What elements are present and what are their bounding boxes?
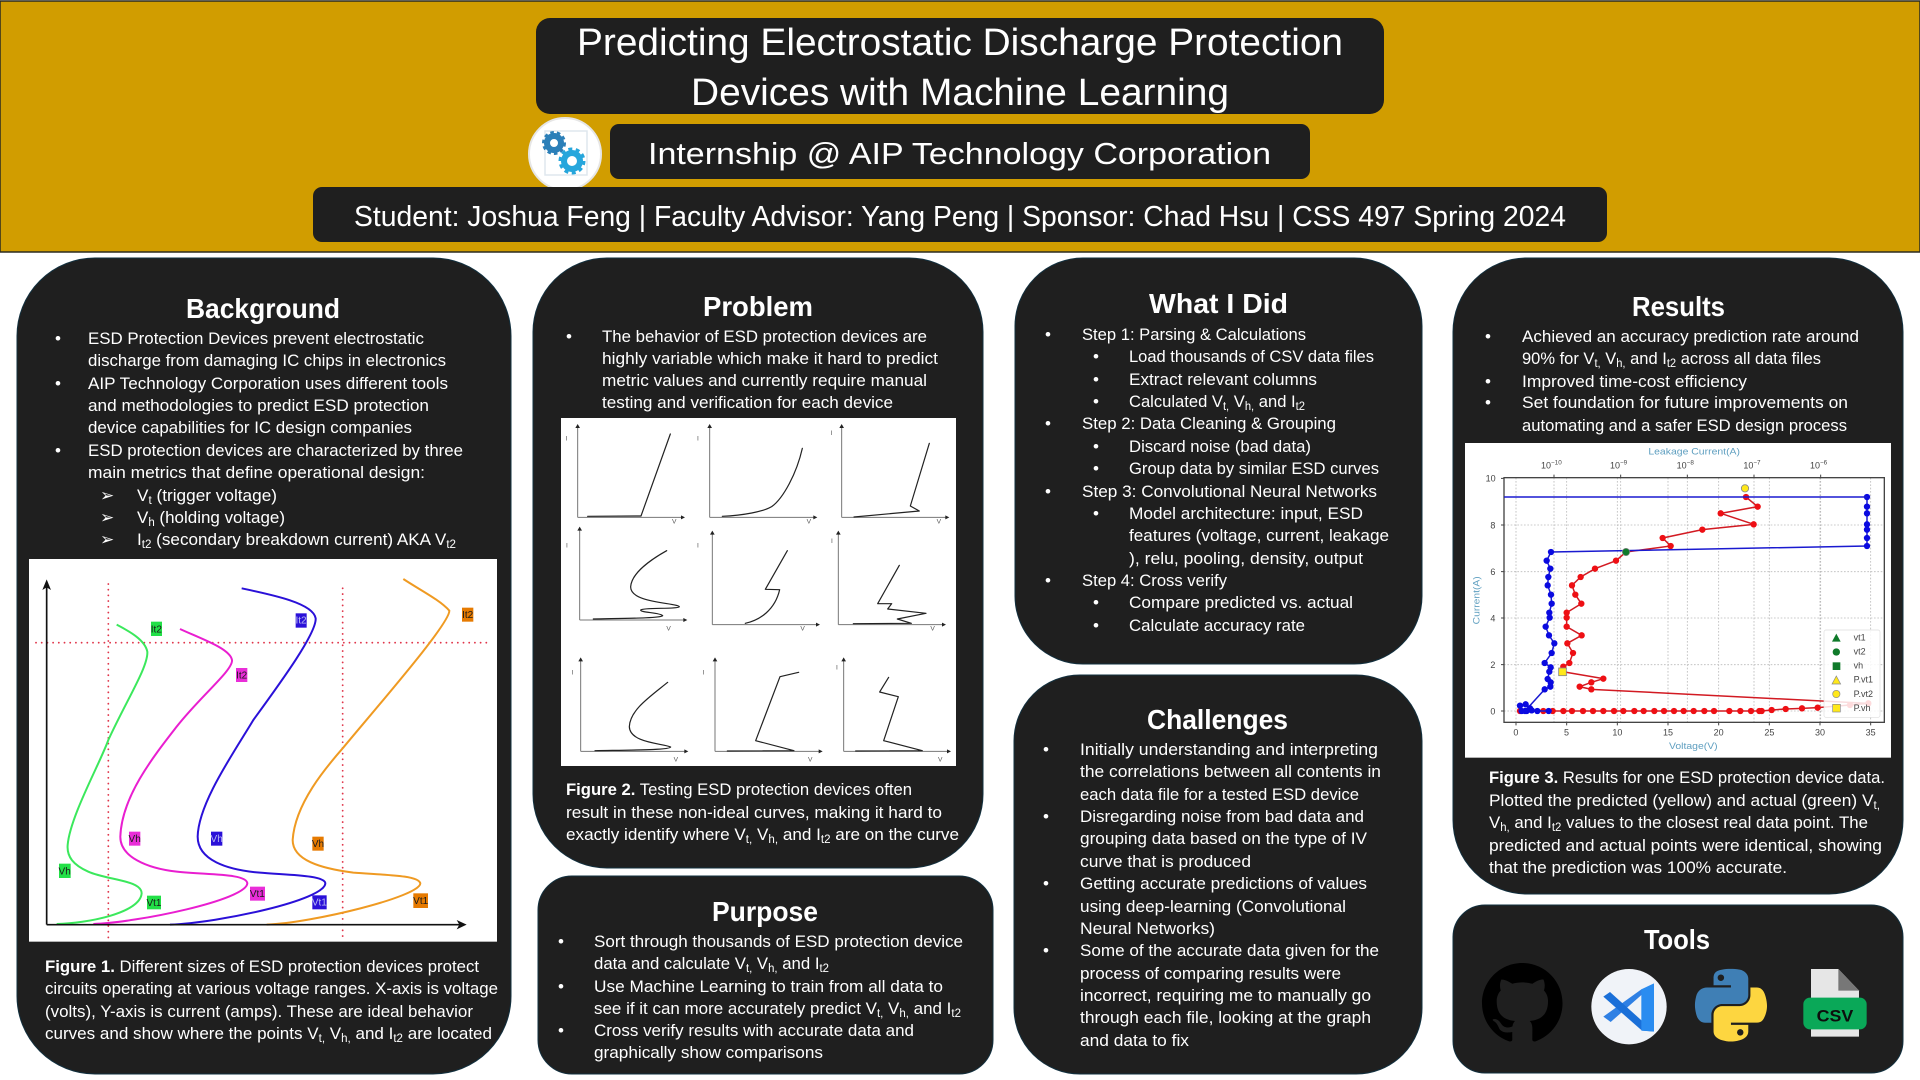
background bullet list: •	[55, 329, 61, 348]
heading: purpose: Purpose	[712, 896, 818, 927]
title box: Devices with Machine Learning	[691, 72, 1229, 114]
results bullet list: 90% for V	[1522, 349, 1597, 368]
figure 3: predicted vs actual scatter plot: −7	[1753, 460, 1761, 467]
figure 3: predicted vs actual scatter plot: 15	[1663, 727, 1673, 737]
figure 3: predicted vs actual scatter plot: 10	[1810, 460, 1820, 470]
results bullet list: •	[1485, 327, 1491, 346]
steps list: •	[1093, 459, 1099, 478]
steps list: Discard noise (bad data)	[1129, 437, 1311, 456]
figure 3: predicted vs actual scatter plot: Current(A)	[1471, 576, 1481, 624]
figure 2: non-ideal IV curves grid: I	[702, 670, 704, 677]
figure 2: non-ideal IV curves grid: V	[808, 757, 813, 764]
steps list: t2	[1296, 401, 1305, 413]
steps list: Load thousands of CSV data files	[1129, 347, 1374, 366]
figure 1: ideal IV curves chart: It2	[236, 670, 248, 681]
background bullet list: (secondary breakdown current) AKA V	[151, 530, 447, 549]
figure 3 caption: Plotted the predicted (yellow) and actual (green) V	[1489, 791, 1867, 810]
figure 2: non-ideal IV curves grid: V	[937, 518, 942, 525]
figure 1: ideal IV curves chart	[29, 559, 497, 942]
figure 3 caption: Figure 3. Results for one ESD protection device data.	[1489, 768, 1885, 787]
steps list: •	[1093, 616, 1099, 635]
figure 1 caption: h,	[341, 1033, 351, 1045]
figure 3: predicted vs actual scatter plot: Leakage Current(A)	[1648, 446, 1740, 456]
heading: what I did: What I Did	[1149, 288, 1288, 319]
figure 3: predicted vs actual scatter plot: −8	[1687, 460, 1694, 467]
figure 2: non-ideal IV curves grid: I	[571, 670, 573, 677]
icon: AIP logo	[529, 118, 601, 190]
results bullet list	[1485, 327, 1859, 435]
panel: background	[17, 258, 511, 1074]
purpose bullet list: see if it can more accurately predict V	[594, 999, 877, 1018]
results bullet list: and I	[1626, 349, 1667, 368]
panel: challenges	[1014, 675, 1422, 1074]
background bullet list: main metrics that define operational design:	[88, 463, 425, 482]
tool icons	[1482, 963, 1867, 1044]
purpose bullet list: •	[558, 977, 564, 996]
title box: Predicting Electrostatic Discharge Protection	[577, 22, 1343, 64]
icon: GitHub	[1482, 963, 1563, 1042]
background bullet list: AIP Technology Corporation uses different tools	[88, 374, 448, 393]
challenges bullet list: curve that is produced	[1080, 852, 1251, 871]
steps list: •	[1045, 325, 1051, 344]
figure 2 caption: V	[752, 825, 769, 844]
figure 3: predicted vs actual scatter plot: 10	[1610, 460, 1620, 470]
steps list: •	[1093, 392, 1099, 411]
problem bullet list	[566, 327, 938, 412]
purpose bullet list: h,	[899, 1008, 909, 1020]
steps list: •	[1045, 414, 1051, 433]
panel: purpose	[538, 876, 993, 1074]
steps list: features (voltage, current, leakage	[1129, 526, 1389, 545]
figure 2: non-ideal IV curves grid: V	[930, 626, 935, 633]
problem bullet list: metric values and currently require manual	[602, 371, 927, 390]
challenges bullet list: through each file, looking at the graph	[1080, 1008, 1371, 1027]
figure 3: predicted vs actual scatter plot	[1465, 443, 1891, 758]
steps list: •	[1093, 504, 1099, 523]
figure 3: predicted vs actual scatter plot: 10	[1743, 460, 1753, 470]
heading: challenges: Challenges	[1147, 704, 1288, 735]
steps list: •	[1045, 482, 1051, 501]
results bullet list: across all data files	[1676, 349, 1821, 368]
figure 3: predicted vs actual scatter plot: vt2	[1854, 647, 1866, 657]
figure 3: predicted vs actual scatter plot: 4	[1490, 613, 1495, 623]
figure 3 caption: predicted and actual points were identical, showing	[1489, 836, 1882, 855]
results bullet list: •	[1485, 393, 1491, 412]
header band	[0, 1, 1920, 252]
figure 2: non-ideal IV curves grid: V	[674, 757, 679, 764]
results bullet list: •	[1485, 372, 1491, 391]
problem bullet list: highly variable which make it hard to predict	[602, 349, 938, 368]
challenges bullet list: Neural Networks)	[1080, 919, 1215, 938]
figure 1 caption: Figure 1. Different sizes of ESD protection devices protect	[45, 957, 479, 976]
subtitle box: Internship @ AIP Technology Corporation	[648, 136, 1271, 171]
figure 3 caption: t2	[1552, 822, 1561, 834]
figure 3: predicted vs actual scatter plot: −9	[1620, 460, 1628, 467]
figure 3: predicted vs actual scatter plot: 20	[1714, 727, 1724, 737]
figure 1 caption: curves and show where the points V	[45, 1024, 318, 1043]
figure 3: predicted vs actual scatter plot: 10	[1677, 460, 1687, 470]
figure 1 caption: are located	[403, 1024, 492, 1043]
purpose bullet list	[558, 932, 963, 1062]
purpose bullet list: Cross verify results with accurate data and	[594, 1021, 914, 1040]
challenges bullet list: •	[1043, 807, 1049, 826]
figure 3: predicted vs actual scatter plot: P.vt1	[1854, 675, 1873, 685]
challenges bullet list: incorrect, requiring me to manually go	[1080, 986, 1371, 1005]
steps list: ), relu, pooling, density, output	[1129, 549, 1363, 568]
background bullet list: •	[55, 441, 61, 460]
steps list: V	[1229, 392, 1245, 411]
results bullet list: Improved time-cost efficiency	[1522, 372, 1748, 391]
steps list: Calculate accuracy rate	[1129, 616, 1305, 635]
figure 1: ideal IV curves chart: Vh	[59, 866, 71, 877]
background bullet list: and methodologies to predict ESD protection	[88, 396, 429, 415]
steps list: Extract relevant columns	[1129, 370, 1317, 389]
purpose bullet list: t,	[746, 963, 752, 975]
icon: CSV file	[1803, 969, 1867, 1037]
background bullet list: (trigger voltage)	[152, 486, 277, 505]
steps list: t,	[1223, 401, 1229, 413]
figure 3: predicted vs actual scatter plot: 2	[1490, 660, 1495, 670]
figure 3: predicted vs actual scatter plot: −6	[1820, 460, 1828, 467]
figure 3: predicted vs actual scatter plot: 30	[1815, 727, 1825, 737]
background bullet list: V	[137, 486, 148, 505]
background bullet list: t2	[142, 539, 151, 551]
results bullet list: t,	[1594, 358, 1601, 370]
figure 2: non-ideal IV curves grid	[561, 418, 956, 766]
figure 1 caption: t,	[319, 1033, 325, 1045]
figure 2 caption: h,	[768, 834, 778, 846]
figure 1: ideal IV curves chart: Vh	[312, 839, 324, 850]
challenges bullet list: the correlations between all contents in	[1080, 762, 1381, 781]
purpose bullet list: and I	[778, 954, 820, 973]
figure 3: predicted vs actual scatter plot: vh	[1854, 661, 1863, 671]
figure 2: non-ideal IV curves grid: V	[938, 757, 943, 764]
credits box: Student: Joshua Feng | Faculty Advisor: Yang Peng | Sponsor: Chad Hsu | CSS 497 Spring 2024	[354, 201, 1566, 233]
challenges bullet list: •	[1043, 740, 1049, 759]
figure 1: ideal IV curves chart: Vt1	[146, 898, 162, 909]
icon: VS Code	[1591, 969, 1667, 1044]
challenges bullet list: •	[1043, 941, 1049, 960]
purpose bullet list: •	[558, 932, 564, 951]
heading: results: Results	[1632, 291, 1725, 322]
steps list: •	[1093, 370, 1099, 389]
figure 1: ideal IV curves chart: It2	[151, 624, 162, 635]
challenges bullet list: Initially understanding and interpreting	[1080, 740, 1378, 759]
figure 2: non-ideal IV curves grid: I	[697, 436, 699, 443]
steps list: Calculated V	[1129, 392, 1225, 411]
figure 2: non-ideal IV curves grid: V	[672, 518, 677, 525]
background bullet list: device capabilities for IC design companies	[88, 418, 412, 437]
steps list: and I	[1254, 392, 1296, 411]
figure 3: predicted vs actual scatter plot: 25	[1764, 727, 1774, 737]
figure 3: predicted vs actual scatter plot: 10	[1541, 460, 1551, 470]
purpose bullet list: •	[558, 1021, 564, 1040]
heading: problem: Problem	[703, 291, 813, 322]
figure 3: predicted vs actual scatter plot: 10	[1612, 727, 1622, 737]
figure 2: non-ideal IV curves grid: I	[566, 436, 568, 443]
challenges bullet list: Getting accurate predictions of values	[1080, 874, 1367, 893]
purpose bullet list: Sort through thousands of ESD protection device	[594, 932, 963, 951]
background bullet list: V	[137, 508, 148, 527]
purpose bullet list: V	[883, 999, 900, 1018]
panel: results	[1453, 258, 1903, 894]
icon: Python	[1695, 969, 1767, 1042]
background bullet list: ➢	[100, 486, 114, 506]
figure 3: predicted vs actual scatter plot: P.vt2	[1854, 689, 1873, 699]
challenges bullet list: and data to fix	[1080, 1031, 1189, 1050]
figure 1: ideal IV curves chart: It2	[295, 616, 307, 627]
title box	[536, 18, 1384, 114]
steps list: Step 1: Parsing & Calculations	[1082, 325, 1306, 344]
figure 1 caption: t2	[393, 1033, 403, 1045]
background bullet list: ESD protection devices are characterized by three	[88, 441, 463, 460]
figure 2: non-ideal IV curves grid: V	[807, 518, 812, 525]
challenges bullet list: grouping data based on the type of IV	[1080, 829, 1368, 848]
background bullet list: discharge from damaging IC chips in electronics	[88, 351, 446, 370]
figure 3: predicted vs actual scatter plot: P.vh	[1854, 703, 1870, 713]
figure 3: predicted vs actual scatter plot: 8	[1490, 520, 1495, 530]
steps list	[1045, 325, 1389, 635]
purpose bullet list: graphically show comparisons	[594, 1043, 823, 1062]
challenges bullet list: Disregarding noise from bad data and	[1080, 807, 1364, 826]
problem bullet list: The behavior of ESD protection devices are	[602, 327, 927, 346]
challenges bullet list: using deep-learning (Convolutional	[1080, 897, 1346, 916]
challenges bullet list: process of comparing results were	[1080, 964, 1341, 983]
figure 3: predicted vs actual scatter plot: Voltage(V)	[1669, 741, 1718, 751]
challenges bullet list	[1043, 740, 1381, 1050]
figure 2: non-ideal IV curves grid: V	[800, 626, 805, 633]
figure 2 caption: result in these non-ideal curves, making it hard to	[566, 803, 942, 822]
figure 2 caption: are on the curve	[831, 825, 959, 844]
steps list: •	[1093, 437, 1099, 456]
background bullet list: ESD Protection Devices prevent electrostatic	[88, 329, 424, 348]
figure 2 caption: exactly identify where V	[566, 825, 745, 844]
figure 3: predicted vs actual scatter plot: 0	[1513, 727, 1518, 737]
figure 3: predicted vs actual scatter plot: vt1	[1854, 632, 1866, 642]
challenges bullet list: Some of the accurate data given for the	[1080, 941, 1379, 960]
figure 1: ideal IV curves chart: Vt1	[413, 896, 429, 907]
figure 1: ideal IV curves chart: Vt1	[312, 898, 327, 909]
results bullet list: automating and a safer ESD design process	[1522, 416, 1847, 435]
figure 3 caption: h,	[1500, 822, 1510, 834]
results bullet list: Set foundation for future improvements on	[1522, 393, 1848, 412]
problem bullet list: testing and verification for each device	[602, 393, 893, 412]
figure 1: ideal IV curves chart: Vh	[129, 834, 141, 845]
figure 3 caption: t,	[1873, 800, 1880, 812]
background bullet list: I	[137, 530, 142, 549]
purpose bullet list: h,	[768, 963, 778, 975]
figure 1: ideal IV curves chart: It2	[462, 610, 474, 621]
figure 3: predicted vs actual scatter plot: 6	[1490, 567, 1495, 577]
background bullet list: ➢	[100, 508, 114, 528]
results bullet list: Achieved an accuracy prediction rate around	[1522, 327, 1859, 346]
background bullet list: h	[148, 517, 155, 529]
background bullet list	[55, 329, 463, 551]
figure 1: ideal IV curves chart: Vh	[211, 834, 223, 845]
subtitle box	[610, 124, 1310, 179]
figure 2: non-ideal IV curves grid: V	[666, 626, 671, 633]
figure 3: predicted vs actual scatter plot: 0	[1490, 706, 1495, 716]
steps list: h,	[1245, 401, 1254, 413]
figure 3: predicted vs actual scatter plot: 10	[1486, 474, 1496, 484]
figure 2: non-ideal IV curves grid: I	[566, 542, 568, 549]
figure 3: predicted vs actual scatter plot: 5	[1564, 727, 1569, 737]
figure 3 caption: values to the closest real data point. The	[1561, 813, 1868, 832]
figure 2: non-ideal IV curves grid: I	[831, 538, 833, 545]
panel: tools	[1453, 905, 1903, 1073]
figure 2 caption: t2	[821, 834, 831, 846]
figure 1 caption: V	[325, 1024, 342, 1043]
background bullet list: (holding voltage)	[155, 508, 285, 527]
figure 2: non-ideal IV curves grid: I	[830, 430, 832, 437]
icon: CSV file: CSV	[1817, 1006, 1853, 1025]
figure 2: non-ideal IV curves grid: I	[836, 665, 838, 672]
purpose bullet list: V	[752, 954, 769, 973]
steps list: Step 2: Data Cleaning & Grouping	[1082, 414, 1336, 433]
figure 2 caption: Figure 2. Testing ESD protection devices often	[566, 780, 912, 799]
heading: background: Background	[186, 293, 340, 324]
purpose bullet list: t2	[820, 963, 829, 975]
challenges bullet list: each data file for a tested ESD device	[1080, 785, 1359, 804]
figure 2 caption	[566, 780, 959, 846]
figure 1 caption: circuits operating at various voltage ranges. X-axis is voltage	[45, 979, 498, 998]
results bullet list: V	[1601, 349, 1617, 368]
figure 3 caption: that the prediction was 100% accurate.	[1489, 858, 1787, 877]
purpose bullet list: data and calculate V	[594, 954, 748, 973]
steps list: •	[1093, 593, 1099, 612]
figure 2 caption: t,	[746, 834, 752, 846]
figure 1 caption	[45, 957, 498, 1045]
steps list: Model architecture: input, ESD	[1129, 504, 1363, 523]
figure 3: predicted vs actual scatter plot: −10	[1551, 460, 1562, 467]
figure 3 caption: and I	[1510, 813, 1552, 832]
steps list: •	[1093, 347, 1099, 366]
steps list: Group data by similar ESD curves	[1129, 459, 1379, 478]
steps list: Step 4: Cross verify	[1082, 571, 1227, 590]
figure 3: predicted vs actual scatter plot: 35	[1866, 727, 1876, 737]
purpose bullet list: t2	[951, 1008, 961, 1020]
purpose bullet list: and I	[909, 999, 951, 1018]
background bullet list: t2	[446, 539, 456, 551]
figure 1 caption: (volts), Y-axis is current (amps). These are ideal behavior	[45, 1002, 473, 1021]
figure 2: non-ideal IV curves grid: I	[697, 542, 699, 549]
challenges bullet list: •	[1043, 874, 1049, 893]
figure 3 caption	[1489, 768, 1885, 877]
figure 1: ideal IV curves chart: Vt1	[250, 889, 265, 900]
panel: what I did	[1015, 258, 1422, 664]
credits box	[313, 187, 1607, 242]
figure 3 caption: V	[1489, 813, 1500, 832]
results bullet list: t2	[1667, 358, 1676, 370]
figure 1 caption: and I	[351, 1024, 393, 1043]
purpose bullet list: Use Machine Learning to train from all data to	[594, 977, 943, 996]
steps list: •	[1045, 571, 1051, 590]
steps list: Compare predicted vs. actual	[1129, 593, 1353, 612]
purpose bullet list: t,	[877, 1008, 883, 1020]
problem bullet list: •	[566, 327, 572, 346]
panel: problem	[533, 258, 983, 868]
background bullet list: t	[148, 495, 153, 507]
heading: tools: Tools	[1644, 924, 1710, 955]
steps list: Step 3: Convolutional Neural Networks	[1082, 482, 1377, 501]
figure 2 caption: and I	[778, 825, 821, 844]
results bullet list: h,	[1616, 358, 1626, 370]
background bullet list: •	[55, 374, 61, 393]
background bullet list: ➢	[100, 530, 114, 550]
